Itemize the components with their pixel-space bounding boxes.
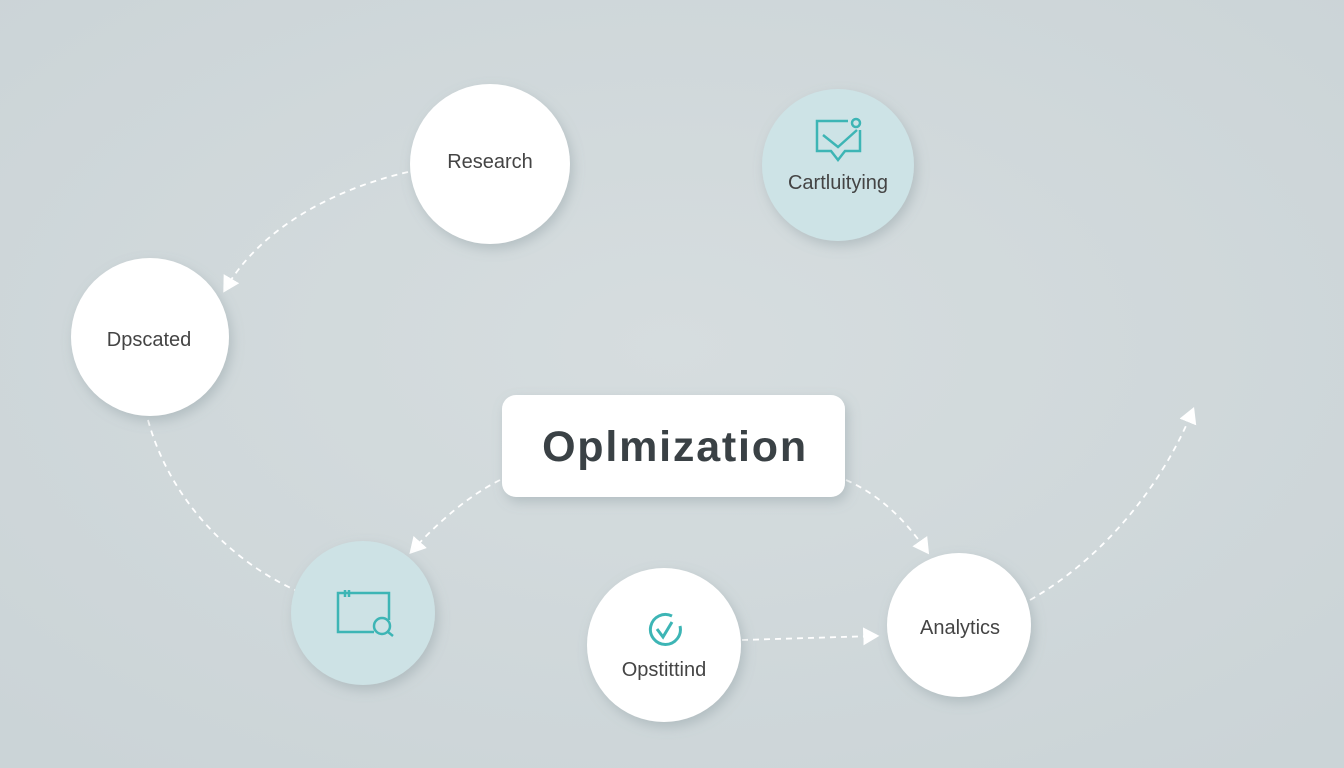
arrow: opstittind to analytics [742, 636, 874, 640]
arrow: optimization to icon circle [413, 480, 500, 550]
node: cartluitying: Cartluitying [788, 172, 888, 194]
node: icon circle [291, 541, 435, 685]
node: analytics: Analytics [920, 617, 1000, 639]
node: opstittind [587, 568, 741, 722]
node: analytics [887, 553, 1031, 697]
arrow: dpscated to icon circle [148, 420, 295, 590]
title box: optimization [502, 395, 845, 497]
node: cartluitying [762, 89, 914, 241]
title box: optimization: Oplmization [542, 423, 808, 471]
icon: folder search [338, 590, 393, 636]
node: research [410, 84, 570, 244]
arrow: optimization to analytics [846, 480, 926, 550]
arrow: research to dpscated [226, 172, 408, 288]
icon: message check [817, 119, 860, 160]
node: research: Research [447, 151, 533, 173]
arrow: analytics outward [1030, 412, 1192, 600]
node: dpscated [71, 258, 229, 416]
node: opstittind: Opstittind [622, 659, 706, 681]
node: dpscated: Dpscated [107, 329, 191, 351]
icon: cycle check [650, 614, 680, 644]
